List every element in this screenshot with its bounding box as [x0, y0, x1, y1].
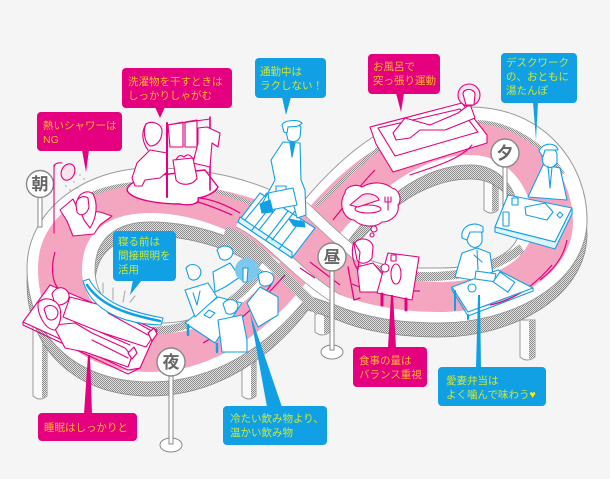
sign: evening	[491, 139, 519, 212]
figure: commuter	[260, 121, 306, 227]
figure: woman in shower	[54, 162, 112, 236]
sign: noon: 昼	[324, 248, 340, 267]
callout: indirect lighting	[113, 231, 176, 295]
callout: bath: 突っ張り運動	[373, 74, 436, 87]
callout: warm drinks: 冷たい飲み物より、	[230, 412, 324, 425]
callout: meal balance: 食事の量は	[359, 354, 412, 367]
figure: indirect lamp	[83, 279, 163, 325]
support legs	[33, 170, 535, 399]
figure: woman hanging laundry	[127, 117, 220, 205]
callout: bento: よく噛んで味わう♥	[446, 388, 536, 401]
callout: sleep	[38, 355, 137, 441]
callout: desk work: の、おともに	[506, 71, 569, 83]
sign: night: 夜	[162, 353, 180, 372]
callout: indirect lighting: 寝る前は	[118, 235, 160, 248]
callout: commute: 通勤中は	[260, 65, 302, 78]
callout: desk work: 湯たんぽ	[506, 85, 548, 97]
figure: night drinkers	[185, 246, 278, 352]
callout: hot shower	[37, 112, 122, 172]
figure: woman eating	[348, 239, 419, 310]
sign: evening: 夕	[496, 144, 514, 163]
callout: desk work	[501, 53, 577, 140]
figure-eight track	[27, 107, 587, 396]
callout: sleep: 睡眠はしっかりと	[44, 421, 128, 434]
callout: bath	[368, 54, 440, 112]
callout: meal balance	[353, 295, 427, 387]
sign: noon	[318, 243, 346, 359]
callout: bento: 愛妻弁当は	[446, 374, 498, 387]
sign: morning	[26, 170, 54, 227]
callout: commute: ラクしない！	[260, 80, 323, 92]
callout: indirect lighting: 間接照明を	[118, 249, 170, 262]
callout: commute	[255, 58, 326, 115]
stairs	[238, 193, 315, 258]
callout: indirect lighting: 活用	[118, 264, 139, 276]
callout: laundry: しっかりしゃがむ	[128, 89, 212, 102]
callout: laundry	[122, 68, 232, 118]
figure: bento man	[452, 224, 533, 319]
callout: hot shower: NG	[43, 134, 59, 146]
callout: warm drinks	[223, 313, 327, 445]
callout: desk work: デスクワーク	[506, 56, 569, 69]
sign: morning: 朝	[32, 175, 48, 194]
figure: woman in bath	[370, 84, 487, 175]
figure: couple in bed	[23, 285, 157, 374]
sign: night	[157, 348, 185, 452]
callout: warm drinks: 温かい飲み物	[230, 426, 293, 439]
callout: meal balance: バランス重視	[359, 368, 422, 381]
callout: bath: お風呂で	[373, 61, 415, 73]
callout: bento	[438, 295, 546, 406]
callout: hot shower: 熱いシャワーは	[43, 119, 116, 132]
figure: desk worker	[495, 144, 572, 249]
thought bubble: meal	[342, 183, 400, 237]
callout: laundry: 洗濯物を干すときは	[128, 75, 222, 88]
